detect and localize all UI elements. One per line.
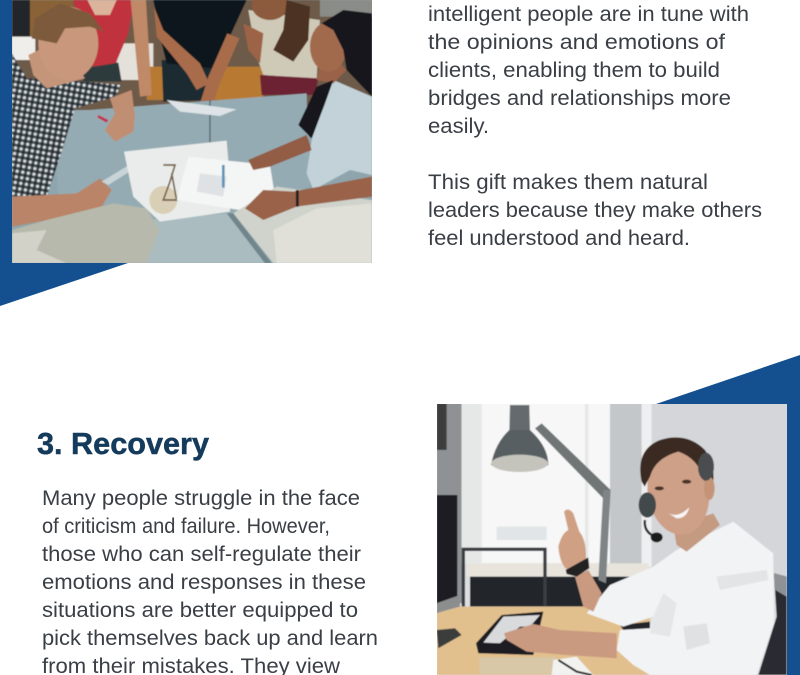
blue accent: right (656, 355, 800, 675)
body text: recovery (42, 486, 378, 675)
woman standing (248, 10, 320, 80)
neck (673, 513, 720, 552)
blue accent: top left (0, 0, 128, 306)
photo: smiling man with headset at desk, thumbs up (437, 403, 787, 675)
man forearm, phone and legs (12, 178, 112, 227)
body text: recovery: those who can self-regulate their (42, 542, 361, 566)
body text: recovery: Many people struggle in the face (42, 486, 360, 510)
body text: emotional intelligence and leadership: clients, enabling them to build (428, 58, 720, 82)
body text: recovery: situations are better equipped to (42, 598, 358, 622)
shirt (587, 522, 774, 675)
woman in red (73, 0, 134, 67)
woman on sofa (233, 187, 372, 263)
man shirt (12, 53, 122, 197)
headset (639, 492, 656, 518)
pillow (124, 141, 230, 222)
photo: team reviewing documents on a sofa (12, 0, 373, 263)
body text: emotional intelligence and leadership: intelligent people are in tune with (428, 2, 749, 26)
body text: recovery: emotions and responses in these (42, 570, 366, 594)
sofa seat (147, 213, 267, 263)
face (646, 450, 710, 534)
body text: emotional intelligence and leadership: feel understood and heard. (428, 226, 690, 250)
body text: emotional intelligence and leadership (428, 2, 762, 250)
dark gap under sleeve (620, 622, 650, 632)
lamp (509, 405, 530, 432)
body text: recovery: pick themselves back up and learn (42, 626, 378, 650)
man head (28, 50, 86, 89)
man in black (162, 60, 213, 102)
body text: emotional intelligence and leadership: leaders because they make others (428, 198, 762, 222)
body text: emotional intelligence and leadership: easily. (428, 114, 489, 138)
body text: emotional intelligence and leadership: bridges and relationships more (428, 86, 731, 110)
monitor (437, 495, 457, 603)
notebook (479, 657, 556, 674)
man arm and hand (105, 90, 135, 142)
sofa back (57, 93, 310, 220)
desk (437, 607, 650, 675)
body text: emotional intelligence and leadership: the opinions and emotions of (428, 30, 725, 54)
forearm and hand on keyboard (504, 624, 617, 658)
credenza (467, 563, 648, 577)
body text: recovery: of criticism and failure. However, (42, 514, 330, 538)
body text: emotional intelligence and leadership: This gift makes them natural (428, 170, 708, 194)
heading: 3. Recovery: 3. Recovery (37, 426, 210, 461)
keyboard (476, 612, 543, 655)
paper stack (177, 157, 274, 211)
chair (758, 573, 787, 675)
raised arm and thumb (575, 570, 602, 612)
